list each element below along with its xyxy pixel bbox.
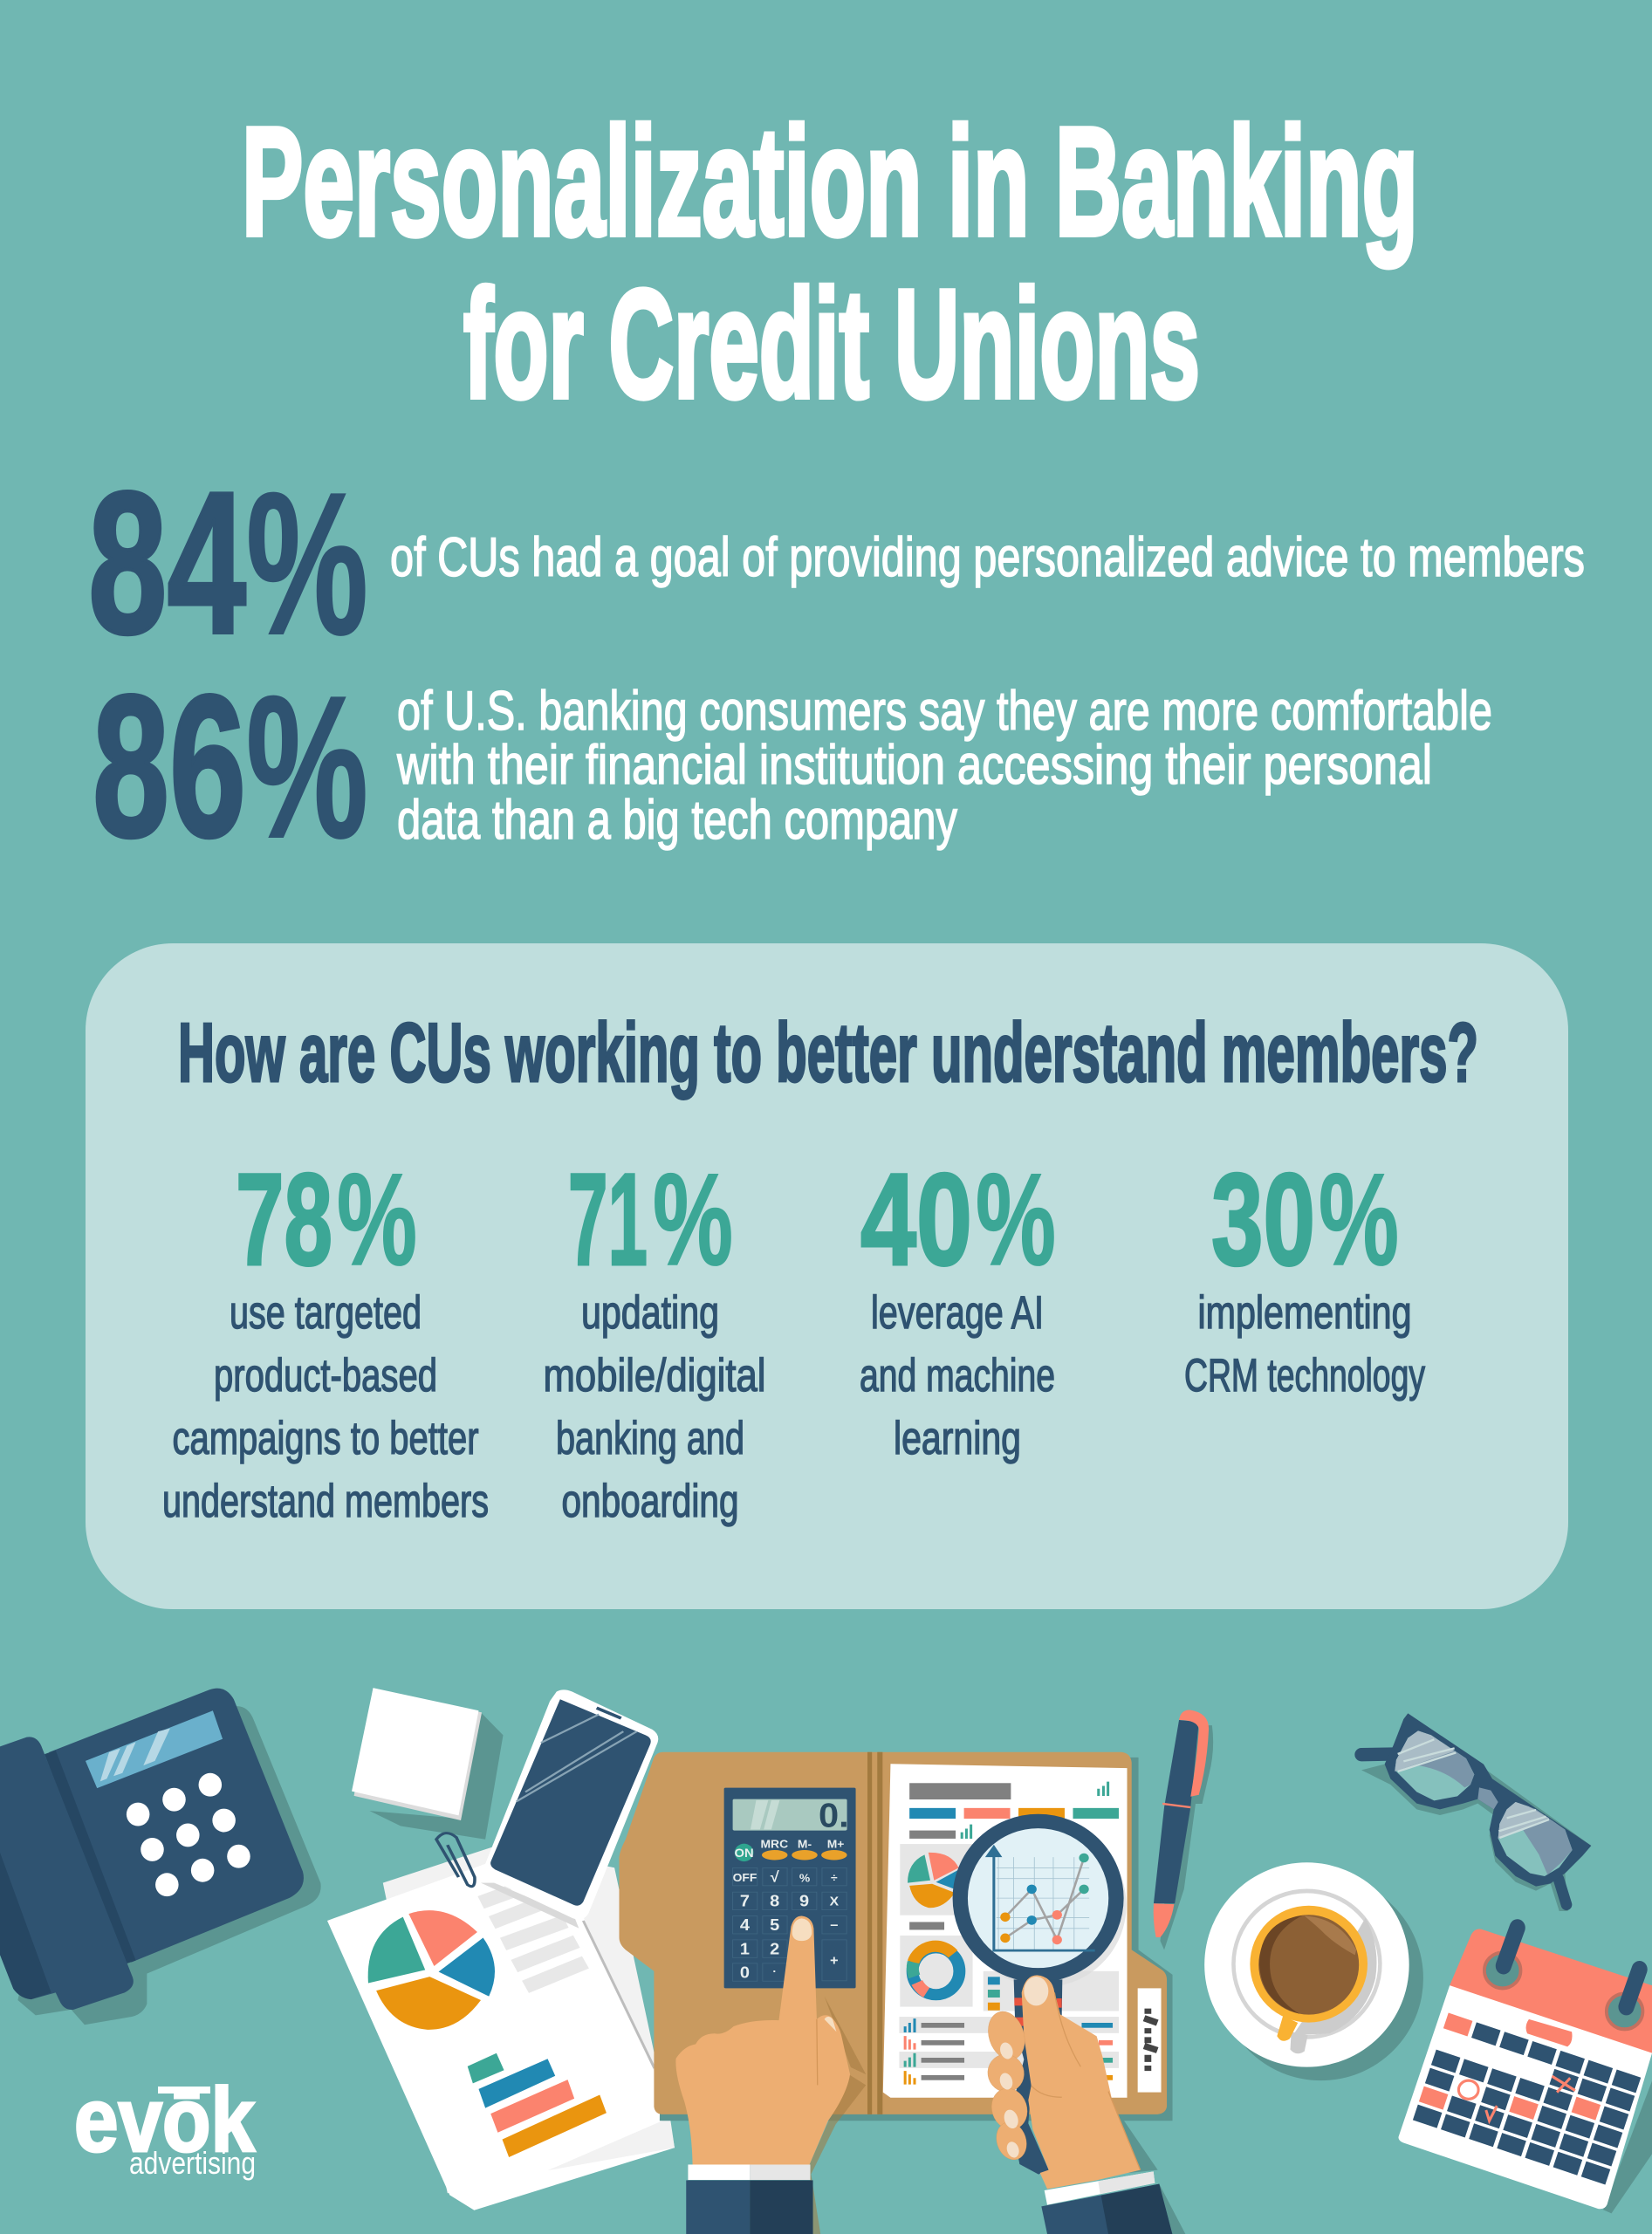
stat column: 40 percent — [860, 1146, 1056, 1464]
stat column: 78 percent: % — [337, 1146, 417, 1292]
logo: evōk advertising: advertising — [129, 2145, 256, 2181]
stat column: 30 percent: implementing — [1197, 1287, 1412, 1339]
stat: 84 percent — [88, 450, 1585, 677]
icon: calculator: 0 — [740, 1963, 750, 1982]
icon: calculator: 7 — [740, 1892, 750, 1910]
stat column: 40 percent: learning — [894, 1413, 1021, 1464]
stat column: 78 percent: understand members — [162, 1476, 489, 1527]
stat column: 30 percent: 30 — [1211, 1146, 1315, 1292]
icon: calculator: 2 — [770, 1940, 779, 1958]
icon: calculator: 4 — [740, 1915, 750, 1935]
icon: calculator: 9 — [799, 1892, 809, 1910]
stat column: 40 percent: leverage AI — [871, 1287, 1044, 1339]
pie chart on paper — [368, 1910, 495, 2030]
stat: 86 percent: % — [246, 654, 368, 881]
icon: calculator: 0. — [819, 1796, 849, 1834]
icon: calculator: ON — [735, 1847, 754, 1861]
icon: calculator: – — [830, 1918, 839, 1933]
stat column: 71 percent: onboarding — [562, 1476, 738, 1527]
icon: calculator: + — [830, 1954, 839, 1968]
icon: open folder — [619, 1752, 1173, 2121]
stat column: 78 percent: product-based — [214, 1350, 437, 1401]
icon: calculator: 1 — [740, 1940, 750, 1958]
document with charts — [883, 1764, 1128, 2098]
stat: 84 percent: 84 — [88, 450, 246, 676]
stat column: 40 percent: 40 — [860, 1146, 972, 1292]
logo: evōk advertising: evōk — [74, 2070, 255, 2171]
left lens — [1395, 1730, 1474, 1800]
stat column: 71 percent: mobile/digital — [543, 1350, 766, 1401]
icon: calculator: MRC — [761, 1838, 788, 1850]
panel: how CUs understand members — [86, 943, 1568, 1609]
icon: eyeglasses — [1361, 1713, 1591, 1911]
icon: hand holding magnifying glass — [983, 1975, 1185, 2234]
stat: 86 percent: 86 — [93, 654, 246, 880]
icon: calculator: · — [772, 1965, 777, 1978]
stat column: 71 percent: % — [653, 1146, 733, 1292]
right lens — [1498, 1802, 1573, 1876]
magnified line chart — [985, 1845, 1095, 1950]
calendar day grid — [1413, 2013, 1641, 2185]
stat column: 30 percent: % — [1319, 1146, 1399, 1292]
stat column: 78 percent: campaigns to better — [173, 1413, 478, 1464]
stat column: 30 percent: CRM technology — [1184, 1350, 1425, 1401]
calendar rings — [1484, 1928, 1642, 2029]
file label — [1138, 1988, 1162, 2093]
icon: sticky note pad — [352, 1688, 504, 1840]
icon: calculator: √ — [771, 1868, 779, 1886]
stat: 86 percent: data than a big tech company — [397, 790, 957, 851]
title — [242, 95, 1418, 430]
icon: calculator: X — [830, 1895, 839, 1909]
icon: paper documents with pie chart — [327, 1845, 675, 2210]
icon: wall calendar — [1398, 1928, 1652, 2213]
icon: calculator: 8 — [770, 1892, 780, 1910]
icon: paperclip — [436, 1833, 475, 1887]
stat column: 40 percent: % — [976, 1146, 1056, 1292]
stat column: 71 percent — [543, 1146, 766, 1527]
stat: 84 percent: % — [246, 451, 368, 677]
icon: calculator — [724, 1788, 856, 1988]
icon: calculator: M+ — [827, 1838, 845, 1850]
icon: pen — [1154, 1710, 1213, 1950]
bar chart on paper — [468, 2053, 607, 2157]
stat column: 71 percent: updating — [581, 1287, 719, 1339]
icon: desk telephone — [0, 1689, 321, 2025]
stat column: 78 percent: use targeted — [230, 1287, 422, 1339]
calendar markings — [1458, 2076, 1575, 2121]
stat column: 40 percent: and machine — [860, 1350, 1055, 1401]
stat column: 30 percent — [1184, 1146, 1425, 1401]
icon: magnifying glass — [960, 1821, 1127, 1987]
icon: calculator: M- — [798, 1838, 812, 1850]
icon: calculator: ÷ — [831, 1871, 838, 1884]
icon: hand pressing calculator — [675, 1916, 866, 2234]
stat: 86 percent: with their financial institution accessing their personal — [396, 735, 1432, 796]
stat column: 71 percent: 71 — [568, 1146, 648, 1292]
stat: 86 percent — [93, 654, 1492, 881]
icon: calculator: OFF — [733, 1871, 757, 1884]
icon: calculator: 5 — [770, 1915, 780, 1935]
stat column: 71 percent: banking and — [556, 1413, 744, 1464]
stat column: 78 percent: 78 — [236, 1146, 332, 1292]
icon: calculator: % — [799, 1872, 810, 1885]
icon: smartphone — [481, 1689, 658, 1929]
stat column: 78 percent — [162, 1146, 489, 1527]
icon: coffee cup on saucer — [1204, 1862, 1423, 2080]
